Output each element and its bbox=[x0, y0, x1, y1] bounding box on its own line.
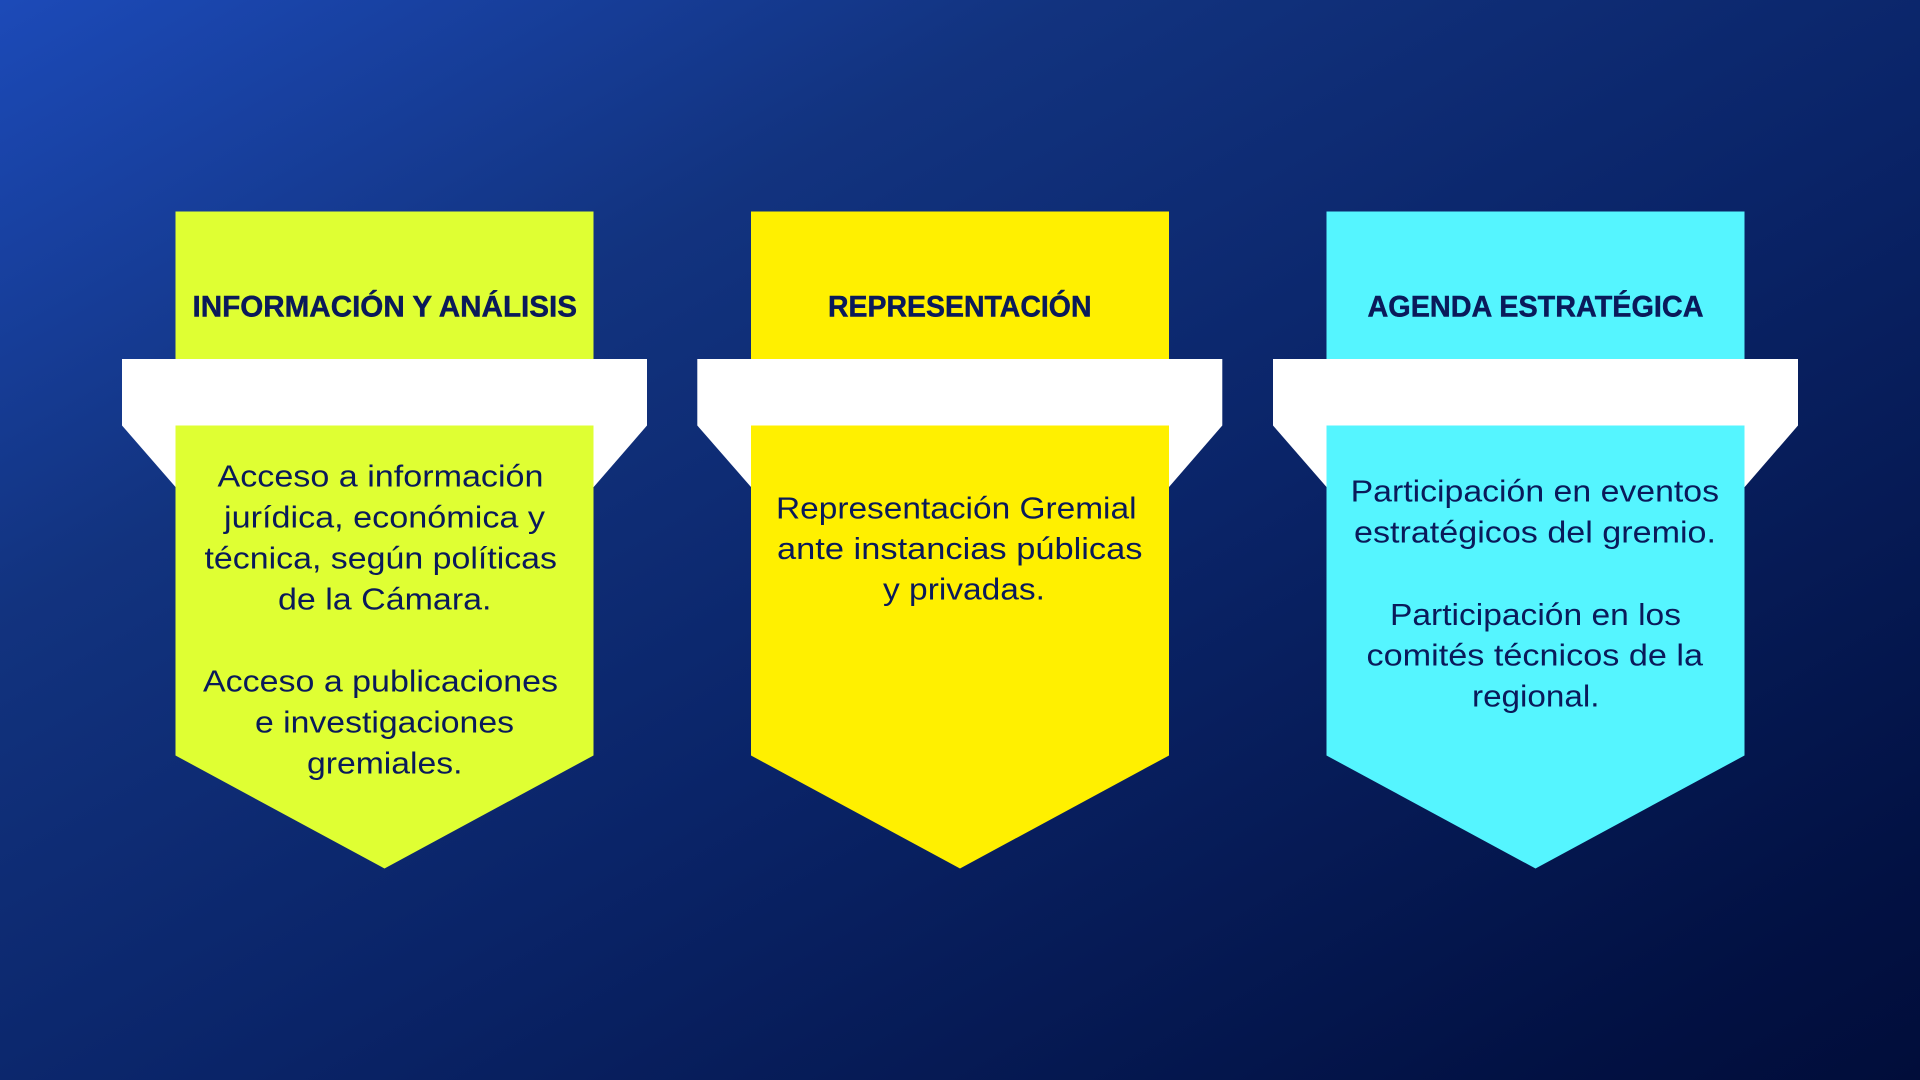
white ribbon bbox=[1273, 359, 1798, 487]
arrow body block bbox=[751, 426, 1169, 868]
body text: regional. bbox=[1472, 678, 1600, 714]
body text bbox=[776, 490, 1142, 607]
heading: AGENDA ESTRATÉGICA bbox=[1368, 290, 1704, 324]
white ribbon bbox=[122, 359, 647, 487]
header block bbox=[176, 212, 594, 359]
arrow body block bbox=[176, 426, 594, 868]
body text: jurídica, económica y bbox=[223, 500, 546, 535]
body text: comités técnicos de la bbox=[1366, 638, 1704, 673]
white ribbon bbox=[697, 359, 1222, 487]
body text: Acceso a información bbox=[218, 459, 544, 494]
body text: Participación en eventos bbox=[1351, 473, 1719, 508]
panel: información y análisis bbox=[122, 212, 647, 868]
body text: de la Cámara. bbox=[278, 581, 492, 616]
body text: gremiales. bbox=[307, 745, 462, 780]
body text bbox=[203, 459, 558, 780]
body text: Acceso a publicaciones bbox=[203, 663, 558, 698]
header block bbox=[751, 212, 1169, 359]
body text bbox=[1351, 473, 1719, 714]
panel: representación bbox=[697, 212, 1222, 868]
body text: técnica, según políticas bbox=[204, 540, 557, 576]
body text: Representación Gremial bbox=[776, 490, 1136, 526]
body text: Participación en los bbox=[1390, 597, 1681, 632]
arrow body block bbox=[1326, 426, 1744, 868]
body text: estratégicos del gremio. bbox=[1354, 514, 1716, 549]
header block bbox=[1326, 212, 1744, 359]
body text: y privadas. bbox=[883, 572, 1045, 607]
body text: ante instancias públicas bbox=[777, 531, 1142, 566]
body text: e investigaciones bbox=[255, 705, 514, 740]
panel: agenda estratégica bbox=[1273, 212, 1798, 868]
heading: INFORMACIÓN Y ANÁLISIS bbox=[192, 290, 577, 324]
heading: REPRESENTACIÓN bbox=[828, 290, 1092, 324]
